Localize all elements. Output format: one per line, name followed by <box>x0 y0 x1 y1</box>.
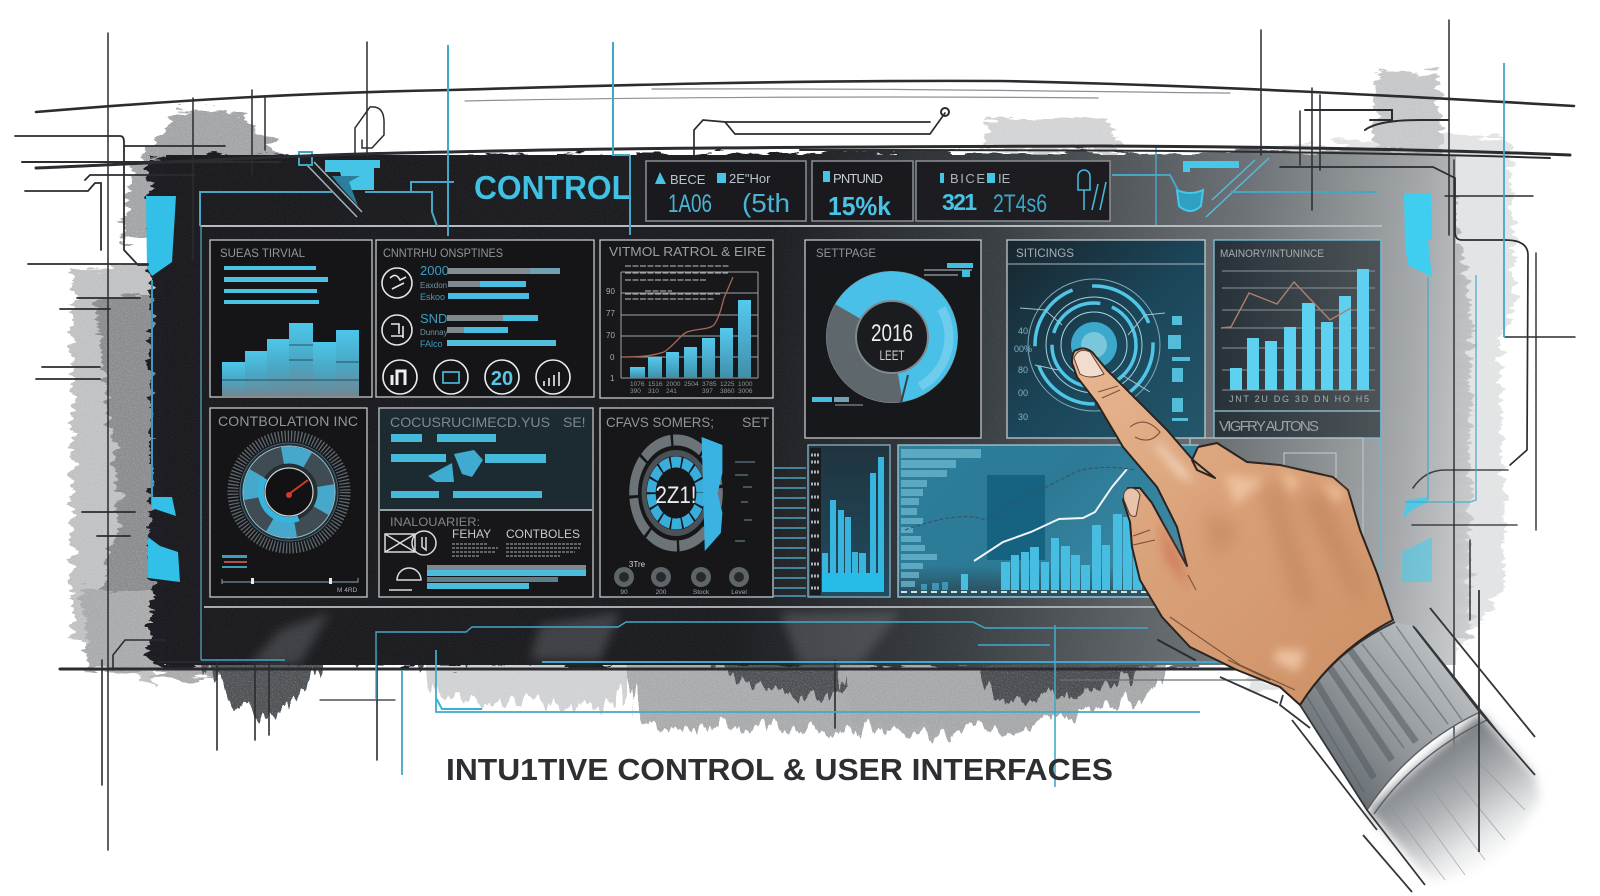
hand silhouette <box>1072 348 1393 705</box>
header stat box 2: 15%k <box>828 191 892 221</box>
hand pointing at dial <box>1072 348 1393 705</box>
panel: radial status <box>600 408 773 597</box>
option labels: Dunnay <box>420 328 448 337</box>
dial side labels: 40 <box>1018 326 1028 336</box>
striped map shapes <box>428 450 483 482</box>
radial gauge <box>634 437 722 551</box>
dial side labels: 30 <box>1018 412 1028 422</box>
fingernail: thumb <box>1124 488 1140 516</box>
knuckle creases <box>1098 386 1295 690</box>
bar and line chart: 90 <box>606 287 615 296</box>
trend line <box>1221 282 1351 328</box>
panel: console <box>379 408 593 597</box>
panel: settings dial <box>1007 240 1205 438</box>
scale marks <box>735 462 755 541</box>
panel: control options <box>376 240 594 397</box>
option labels <box>420 263 449 349</box>
panel 6 title: CFAVS SOMERS; <box>606 414 714 430</box>
header stat box 3: BICE <box>950 171 985 186</box>
top-right cyan bracket ornament <box>1112 145 1377 225</box>
white trend line <box>974 469 1127 561</box>
row labels <box>810 448 821 595</box>
dial side indicators <box>1168 316 1190 421</box>
divider <box>380 509 592 511</box>
panel: control gauge <box>210 408 367 597</box>
header stat box 2 <box>812 161 913 221</box>
panel 8 title: SITICINGS <box>1016 246 1074 260</box>
knob labels: Stock <box>693 589 710 596</box>
bar and line chart: 1076 <box>630 381 645 388</box>
gauge slider <box>222 578 358 594</box>
icon: half dial <box>389 568 421 590</box>
header stat box 3 <box>916 161 1110 221</box>
header stat box 2: PNTUND <box>833 171 883 186</box>
side rows connecting to column chart <box>773 468 806 596</box>
dial side labels: 00 <box>1018 388 1028 398</box>
bar and line chart: 3006 <box>738 388 753 395</box>
option labels: Eaxdon <box>420 281 447 290</box>
bar and line chart: 3785 <box>702 381 717 388</box>
panel 5 set label: SE! <box>563 414 586 430</box>
sleeve: knit cuff <box>1220 590 1540 892</box>
axis labels: JNT 2U DG 3D DN HO H5 <box>1229 394 1369 404</box>
bar and line chart: 70 <box>606 331 615 340</box>
icon: hand dial <box>412 531 436 555</box>
knob labels: Level <box>731 589 747 596</box>
lower section title: INALOUARIER: <box>390 515 480 529</box>
panel 6 set label: SET <box>742 414 770 430</box>
panel 1 stacked columns <box>222 323 359 396</box>
knob labels: 3Tre <box>629 560 646 569</box>
panel 2 title: CNNTRHU ONSPTINES <box>383 246 503 260</box>
bars <box>822 457 884 592</box>
donut value: 2016 <box>871 320 913 347</box>
sleeve hatching <box>1385 738 1525 880</box>
icon row <box>383 360 570 394</box>
bar and line chart: 310 <box>648 388 659 395</box>
header stat box 1: BECE <box>670 172 706 187</box>
gauge value: 2Z1! <box>656 482 696 509</box>
control knobs <box>614 567 749 587</box>
horizontal bars <box>901 449 981 587</box>
bar and line chart: 2000 <box>666 381 681 388</box>
panel: trend chart <box>898 445 1198 597</box>
option labels: 2000 <box>420 263 449 278</box>
knob labels: 200 <box>656 589 667 596</box>
header stat box 1: (5th <box>742 188 790 218</box>
screen frame <box>152 226 1382 660</box>
chart grid <box>1222 271 1375 390</box>
panel: settings page donut <box>805 240 981 438</box>
dial side labels: 80 <box>1018 365 1028 375</box>
bar and line chart: 0 <box>610 353 615 362</box>
panel 4 title: CONTBOLATION INC <box>218 413 358 429</box>
ink wash behind the screen <box>60 60 1540 750</box>
vertical bars <box>921 514 1142 590</box>
panel: faded lower-right card <box>1190 240 1381 598</box>
dim trend curve <box>905 468 1135 530</box>
donut label: LEET <box>880 347 905 363</box>
bar and line chart: 3860 <box>720 388 735 395</box>
tiny body text <box>452 544 582 556</box>
panel 1 title: SUEAS TIRVIAL <box>220 246 305 260</box>
axis ticks <box>901 591 1170 593</box>
cuff seam <box>1367 712 1487 814</box>
option bars <box>447 268 560 346</box>
option labels: Eskoo <box>420 292 445 302</box>
gauge slider: M 4RD <box>337 587 358 594</box>
icon: option dial 1 <box>382 268 412 298</box>
panel: column chart <box>808 445 890 597</box>
label pair: FEHAY <box>452 527 491 541</box>
concentric dial <box>1020 279 1165 411</box>
panel 3 title: VITMOL RATROL & EIRE <box>609 244 766 259</box>
panel 9 title: MAINORY/INTUNINCE <box>1220 248 1324 260</box>
title: INTU1TIVE CONTROL & USER INTERFACES <box>446 752 1113 787</box>
knob labels: 90 <box>620 589 628 596</box>
donut chart <box>814 259 970 415</box>
label pair <box>452 527 580 541</box>
donut legend bottom <box>812 397 863 405</box>
bar and line chart: 77 <box>606 309 615 318</box>
panel 7 title: SETTPAGE <box>816 246 876 260</box>
icon: envelope <box>385 534 415 552</box>
panel: quick trial <box>210 240 372 397</box>
header stat box 1 <box>646 161 806 221</box>
heading: CONTROL: CONTROL <box>474 170 631 207</box>
sleeve outlines <box>1220 590 1535 892</box>
red shadow near thumb <box>1158 520 1188 590</box>
right cyan side brackets <box>1402 193 1432 582</box>
finger highlights <box>1152 442 1345 672</box>
icon row: 20 <box>491 368 513 390</box>
tendon shading <box>1205 480 1365 610</box>
gauge legend <box>222 555 247 568</box>
bar and line chart: 397 <box>702 388 713 395</box>
header stat box 3: 321 <box>942 189 977 215</box>
cuff ribbing <box>1306 626 1462 792</box>
circuit lines: cyan sketch <box>201 42 1504 787</box>
knob labels <box>620 560 747 596</box>
bar and line chart: 1 <box>610 374 615 383</box>
fingernail: index <box>1074 350 1104 377</box>
bar and line chart <box>606 266 758 395</box>
sub heading: VIGFRY AUTONS <box>1219 418 1319 435</box>
panel 1 horizontal bars <box>224 266 328 304</box>
bar and line chart: 241 <box>666 388 677 395</box>
header stat box 3: IE <box>998 171 1011 186</box>
panel 5 title: COCUSRUCIMECD.YUS <box>390 414 550 430</box>
panel: memory chart <box>1214 240 1381 438</box>
dial side labels: 00% <box>1014 344 1032 354</box>
speed gauge <box>233 436 345 548</box>
bar and line chart: 1516 <box>648 381 663 388</box>
top-left cyan bracket ornament <box>200 152 454 226</box>
option labels: SND <box>420 311 447 326</box>
header stat box 1: 2E"Hor <box>729 171 771 186</box>
bar and line chart: 2504 <box>684 381 699 388</box>
dark control screen <box>60 100 1540 740</box>
column bars <box>1230 269 1369 390</box>
bar and line chart: 390 <box>630 388 641 395</box>
header stat box 1: 1A06 <box>668 190 712 218</box>
icon: option dial 2 <box>382 315 412 345</box>
lower bars <box>427 565 586 589</box>
label pair: CONTBOLES <box>506 527 580 541</box>
left cyan side brackets <box>146 196 180 582</box>
option labels: FAlco <box>420 339 443 349</box>
bar and line chart: 1000 <box>738 381 753 388</box>
dial side labels <box>1014 326 1032 422</box>
panel: virtual ratio chart <box>600 240 773 398</box>
header stat box 3: 2T4s6 <box>993 190 1047 218</box>
bar and line chart: 1225 <box>720 381 735 388</box>
donut legend top <box>924 263 973 277</box>
cyan data bars <box>391 434 546 498</box>
